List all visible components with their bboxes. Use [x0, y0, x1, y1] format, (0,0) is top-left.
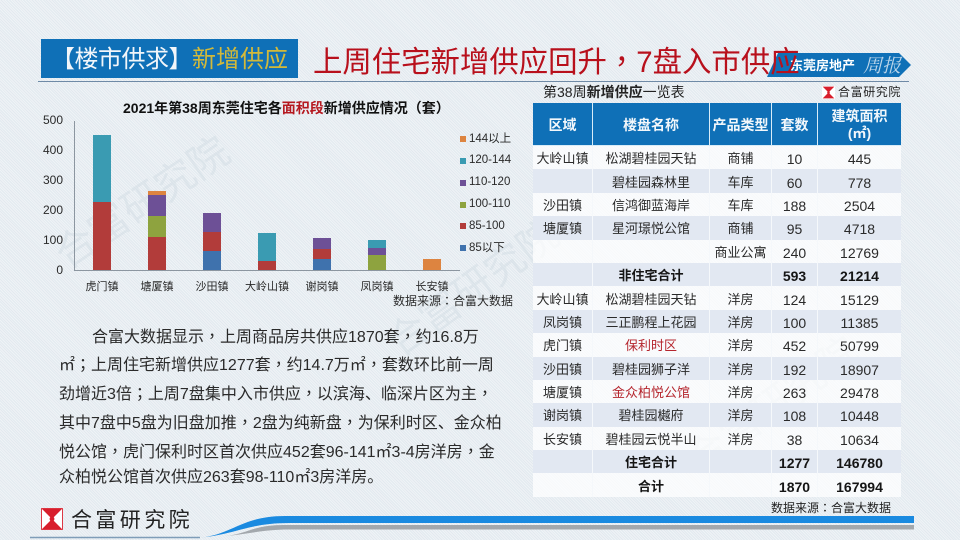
row: 10: [787, 151, 802, 167]
row: 12769: [840, 245, 879, 261]
y axis labels: 200: [43, 203, 63, 217]
row: 沙田镇: [543, 362, 582, 377]
row: 碧桂园云悦半山: [605, 432, 696, 447]
row: 谢岗镇: [543, 408, 582, 423]
row: 100: [783, 315, 806, 331]
row: 10448: [840, 408, 879, 424]
row: 124: [783, 292, 806, 308]
table header: 产品类型: [712, 116, 768, 132]
row: [533, 333, 901, 357]
row: 4718: [844, 221, 875, 237]
row: 15129: [840, 292, 879, 308]
row: 50799: [840, 338, 879, 354]
x axis labels: 塘厦镇: [140, 279, 174, 293]
row: 洋房: [727, 338, 754, 353]
x axis labels: 谢岗镇: [306, 279, 338, 293]
row: 大岭山镇: [536, 151, 588, 166]
row: 虎门镇: [543, 338, 582, 353]
row: 240: [783, 245, 806, 261]
body paragraph: [59, 323, 502, 486]
subtotal row: 146780: [836, 455, 883, 471]
legend: 120-144: [469, 154, 512, 166]
y axis labels: 0: [56, 263, 63, 277]
total row: 1870: [779, 479, 810, 495]
row: 松湖碧桂园天钻: [605, 151, 696, 166]
row: 263: [783, 385, 806, 401]
bar: 虎门镇: [93, 135, 111, 270]
header divider line: [38, 81, 909, 82]
banner: weekly report tag: 周报: [863, 56, 903, 77]
body paragraph: 劲增近3倍；上周7盘集中入市供应，以滨海、临深片区为主，: [59, 380, 493, 404]
section tag: 【楼市供求】新增供应: [51, 46, 288, 73]
row: 29478: [840, 385, 879, 401]
stacked bar chart: [43, 98, 513, 309]
footer logo: 合富研究院: [71, 509, 193, 532]
table header: (㎡): [848, 125, 871, 141]
subtotal row: 非住宅合计: [618, 268, 684, 283]
row: 95: [787, 221, 802, 237]
background watermarks: 合富研究院: [679, 329, 867, 482]
y axis labels: 400: [43, 143, 63, 157]
subtotal row: 1277: [779, 455, 810, 471]
y axis labels: 300: [43, 173, 63, 187]
x axis labels: [86, 279, 448, 293]
row: 大岭山镇: [536, 292, 588, 307]
row: 商业公寓: [714, 245, 766, 260]
row: 188: [783, 198, 806, 214]
row: 车库: [727, 198, 754, 213]
banner: weekly report tag: 东莞房地产: [790, 58, 855, 73]
row: 凤岗镇: [543, 315, 582, 330]
row: 松湖碧桂园天钻: [605, 292, 696, 307]
row: 洋房: [727, 385, 754, 400]
row: 碧桂园狮子洋: [612, 362, 690, 377]
row: 碧桂园樾府: [618, 408, 684, 423]
x axis labels: 凤岗镇: [360, 279, 394, 293]
subtotal row: 住宅合计: [625, 455, 677, 470]
row: 778: [848, 175, 871, 191]
total row: 167994: [836, 479, 883, 495]
x axis labels: 大岭山镇: [245, 279, 289, 293]
row: 碧桂园森林里: [612, 175, 690, 190]
footer band: [30, 516, 914, 538]
chart source: 数据来源：合富大数据: [393, 292, 513, 309]
x axis labels: 沙田镇: [196, 279, 228, 293]
body paragraph: 众柏悦公馆首次供应263套98-110㎡3房洋房。: [59, 469, 383, 486]
legend: 85-100: [469, 220, 505, 232]
supply table: [533, 103, 901, 497]
row: 信鸿御蓝海岸: [612, 198, 690, 213]
row: 108: [783, 408, 806, 424]
row: 沙田镇: [543, 198, 582, 213]
table header: 建筑面积: [832, 108, 888, 124]
table header: 楼盘名称: [623, 116, 679, 132]
row: 商铺: [727, 151, 754, 166]
row: 塘厦镇: [543, 221, 582, 236]
body paragraph: 其中7盘中5盘为旧盘加推，2盘为纯新盘，为保利时区、金众柏: [59, 409, 502, 433]
legend: 144以上: [469, 132, 511, 145]
bar: 凤岗镇: [368, 240, 386, 270]
row: [533, 310, 901, 333]
subtotal row: [533, 263, 901, 286]
x axis labels: 虎门镇: [86, 279, 118, 293]
bar: 长安镇: [423, 259, 441, 270]
y axis labels: 100: [43, 233, 63, 247]
subtotal row: 21214: [840, 268, 879, 284]
body paragraph: 合富大数据显示，上周商品房共供应1870套，约16.8万: [92, 323, 479, 347]
row: [533, 240, 901, 263]
row: 18907: [840, 362, 879, 378]
row: [533, 403, 901, 427]
subtotal row: 593: [783, 268, 806, 284]
legend: [460, 132, 512, 254]
row: 38: [787, 432, 802, 448]
total row: [533, 473, 901, 497]
bar: 沙田镇: [203, 213, 221, 270]
row: 445: [848, 151, 871, 167]
row: 星河璟悦公馆: [612, 221, 690, 236]
y axis labels: 500: [43, 113, 63, 127]
legend: 100-110: [469, 198, 510, 210]
body paragraph: 悦公馆，虎门保利时区首次供应452套96-141㎡3-4房洋房，金: [59, 438, 495, 462]
y axis labels: [43, 113, 63, 277]
chart title: 2021年第38周东莞住宅各面积段新增供应情况（套）: [123, 98, 450, 118]
row: 10634: [840, 432, 879, 448]
row: 洋房: [727, 362, 754, 377]
row: [533, 146, 901, 169]
bar: 谢岗镇: [313, 238, 331, 270]
row: 保利时区: [625, 338, 677, 353]
bar: 大岭山镇: [258, 233, 276, 270]
table title: 第38周新增供应一览表: [543, 84, 685, 100]
row: 452: [783, 338, 806, 354]
row: 洋房: [727, 432, 754, 447]
row: 商铺: [727, 221, 754, 236]
row: 塘厦镇: [543, 385, 582, 400]
table header: [533, 103, 901, 497]
row: [533, 193, 901, 216]
row: 三正鹏程上花园: [605, 315, 696, 330]
legend: 110-120: [469, 176, 510, 188]
row: 长安镇: [543, 432, 582, 447]
row: [533, 286, 901, 310]
row: [533, 216, 901, 240]
subtotal row: [533, 450, 901, 473]
row: 洋房: [727, 408, 754, 423]
table header: 套数: [780, 116, 808, 132]
row: [533, 380, 901, 403]
row: 车库: [727, 175, 754, 190]
row: 192: [783, 362, 806, 378]
total row: 合计: [638, 479, 664, 494]
background watermarks: 合富研究院: [47, 129, 238, 277]
legend: 85以下: [469, 241, 505, 254]
axes: [74, 121, 460, 270]
row: [533, 169, 901, 193]
table logo: 合富研究院: [838, 85, 901, 99]
row: 60: [787, 175, 802, 191]
table header: 区域: [548, 116, 576, 132]
row: 洋房: [727, 315, 754, 330]
background watermarks: 合富研究院: [379, 212, 567, 365]
bar: 塘厦镇: [148, 191, 166, 270]
x axis labels: 长安镇: [416, 279, 448, 293]
row: 11385: [841, 315, 878, 331]
row: [533, 357, 901, 380]
body paragraph: ㎡；上周住宅新增供应1277套，约14.7万㎡，套数环比前一周: [59, 351, 494, 375]
row: [533, 427, 901, 450]
row: 洋房: [727, 292, 754, 307]
table source: 数据来源：合富大数据: [771, 499, 891, 516]
row: 2504: [844, 198, 875, 214]
row: 金众柏悦公馆: [612, 385, 690, 400]
title: 上周住宅新增供应回升，7盘入市供应: [313, 39, 800, 81]
section tag: [41, 39, 298, 78]
banner: weekly report tag: [767, 53, 911, 77]
